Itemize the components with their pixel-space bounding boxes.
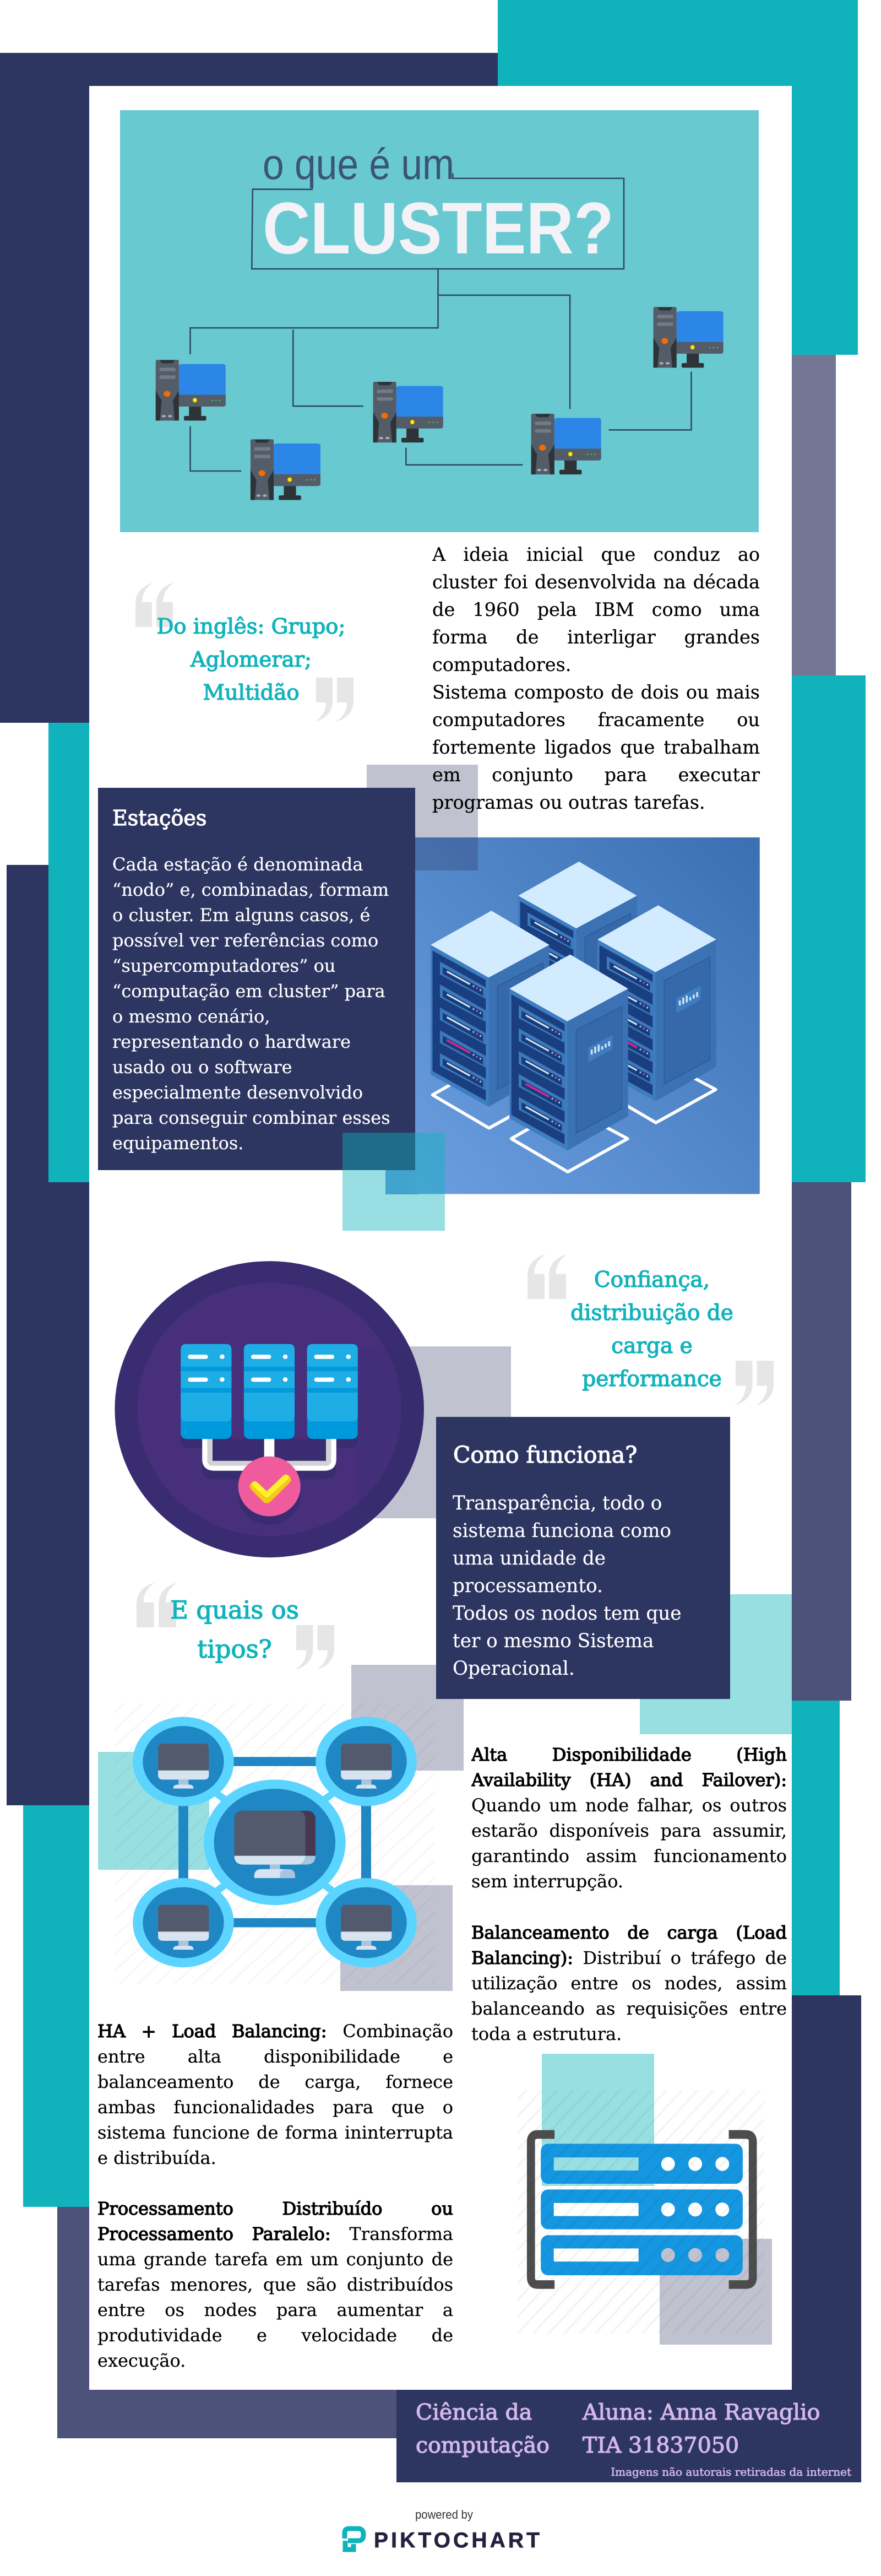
logo: powered by Piktochart: powered by <box>415 2508 473 2521</box>
icon: opening quote 3 <box>137 1583 177 1627</box>
text: high availability and load balancing: toda a estrutura. <box>471 2023 622 2044</box>
background block: navy left middle <box>7 865 89 1805</box>
node: bottom left <box>133 1878 234 1967</box>
quote: Confiança: Confiança, <box>594 1268 710 1292</box>
text: high availability and load balancing: Availability (HA) and Failover): <box>471 1769 787 1790</box>
icon: purple circle with servers and check <box>115 1261 424 1558</box>
icon: logo mark <box>345 2529 363 2550</box>
text: high availability and load balancing: Balanceamento de carga (Load <box>471 1922 787 1943</box>
footer text: student: Aluna: Anna Ravaglio <box>583 2400 820 2425</box>
text: HA + load balancing and distributed processing: produtividade e velocidade de <box>97 2325 453 2346</box>
text: Estações body: “supercomputadores” ou <box>112 955 335 976</box>
icon: server stack in brackets <box>518 2090 764 2334</box>
text: Estações body: o cluster. Em alguns casos, é <box>112 905 370 926</box>
title frame and connector lines <box>191 174 691 471</box>
text: HA + load balancing and distributed processing <box>97 2021 453 2371</box>
text: intro paragraph: computadores. <box>432 654 571 675</box>
quote: Do inglês: Do inglês: Grupo; <box>157 614 345 639</box>
text: high availability and load balancing <box>471 1744 787 2044</box>
background block: navy top left <box>0 53 498 723</box>
text: Estações body: possível ver referências como <box>112 930 378 951</box>
decorative square: grey behind purple icon <box>358 1346 511 1518</box>
background block: muted purple right <box>792 355 836 675</box>
decorative square: teal left of network <box>98 1752 209 1870</box>
quote: Confiança: carga e <box>611 1334 693 1359</box>
text: high availability and load balancing: balanceando as requisições entre <box>471 1998 787 2019</box>
text: Estações body: usado ou o software <box>112 1057 292 1078</box>
footer note: Imagens não autorais retiradas da internet <box>611 2465 851 2478</box>
background block: teal top right <box>498 0 858 355</box>
logo: powered by Piktochart: PIKTOCHART <box>374 2529 540 2552</box>
text: intro paragraph: programas ou outras tarefas. <box>432 792 705 813</box>
decorative square: translucent grey <box>367 765 478 870</box>
text: Estações body <box>112 854 390 1154</box>
text: high availability and load balancing: Quando um node falhar, os outros <box>471 1795 787 1816</box>
text: high availability and load balancing: utilização entre os nodes, assim <box>471 1973 787 1994</box>
text: HA + load balancing and distributed processing: balanceamento de carga, fornece <box>97 2071 453 2092</box>
text: high availability and load balancing: Balancing): Distribuí o tráfego de <box>471 1947 787 1968</box>
server units <box>181 1344 358 1439</box>
hero panel: what is a cluster <box>120 110 759 532</box>
title: o que é um cluster: CLUSTER? <box>263 188 614 269</box>
connector <box>208 1437 331 1466</box>
quote: E quais os tipos: E quais os <box>170 1595 299 1625</box>
text: Como funciona body: ter o mesmo Sistema <box>453 1630 654 1652</box>
rack: front <box>509 955 628 1172</box>
text: Estações body: especialmente desenvolvido <box>112 1082 363 1103</box>
title: o que é um cluster: o que é um <box>263 139 454 188</box>
quote: Confiança: performance <box>582 1367 722 1392</box>
text: intro paragraph: em conjunto para executar <box>432 764 760 786</box>
text: Estações body: para conseguir combinar esses <box>112 1107 390 1128</box>
text: Como funciona body: uma unidade de <box>453 1547 606 1570</box>
node: central monitor <box>204 1779 346 1905</box>
quote: Do inglês <box>157 614 345 705</box>
network diagram with computers <box>155 173 724 500</box>
text: HA + load balancing and distributed processing: execução. <box>97 2350 186 2371</box>
decorative square: grey bottom of network <box>340 1885 453 1991</box>
quote: Do inglês: Multidão <box>203 680 300 705</box>
text: intro paragraph: A ideia inicial que conduz ao <box>432 544 760 565</box>
background block: teal left lower <box>23 1805 89 2207</box>
text: intro paragraph: cluster foi desenvolvida na década <box>432 571 760 593</box>
footer text: course <box>416 2400 550 2458</box>
footer text: course: Ciência da <box>416 2400 532 2425</box>
decorative square: teal behind panel <box>640 1594 792 1734</box>
text: high availability and load balancing: sem interrupção. <box>471 1871 623 1892</box>
icon: opening quote 2 <box>527 1254 567 1299</box>
rack: right <box>597 905 716 1123</box>
text: HA + load balancing and distributed processing: Processamento Distribuído ou <box>97 2198 453 2219</box>
brackets <box>531 2134 753 2285</box>
text: HA + load balancing and distributed processing: e distribuída. <box>97 2147 216 2168</box>
icon: opening quote 1 <box>135 583 174 627</box>
white content panel <box>89 86 792 2390</box>
text: Estações body: equipamentos. <box>112 1133 243 1154</box>
text: Como funciona body: sistema funciona como <box>453 1520 671 1542</box>
text: HA + load balancing and distributed processing: sistema funcione de forma ininterrupta <box>97 2122 453 2143</box>
footer text: course: computação <box>416 2433 550 2458</box>
quote: Confiança: distribuição de <box>570 1301 733 1325</box>
title: o que é um cluster <box>263 139 614 269</box>
text: Estações body: Cada estação é denominada <box>112 854 363 875</box>
decorative square: grey below server <box>660 2239 772 2345</box>
text: HA + load balancing and distributed processing: HA + Load Balancing: Combinação <box>97 2021 453 2042</box>
text: HA + load balancing and distributed processing: ambas funcionalidades para que o <box>97 2097 453 2118</box>
text: Como funciona body: processamento. <box>453 1575 603 1597</box>
rack: left <box>431 911 550 1128</box>
icon: closing quote 2 <box>735 1361 774 1405</box>
quote: Confiança <box>570 1268 733 1392</box>
check badge <box>238 1457 301 1516</box>
text: intro paragraph <box>432 544 760 813</box>
text: HA + load balancing and distributed processing: tarefas menores, que são distribuídos <box>97 2274 453 2295</box>
decorative square: teal above server <box>542 2054 654 2186</box>
panel: Estações <box>98 788 415 1170</box>
icon: computers <box>156 307 724 500</box>
image extension: blue under the Estações panel <box>385 1157 418 1194</box>
text: intro paragraph: forma de interligar grandes <box>432 626 760 648</box>
text: Como funciona body: Transparência, todo o <box>453 1492 662 1514</box>
connectors <box>178 1757 371 1927</box>
text: Como funciona body: Todos os nodos tem que <box>453 1603 681 1625</box>
decorative square: grey top of network <box>351 1665 464 1771</box>
logo: powered by Piktochart <box>342 2508 540 2552</box>
footer text: student <box>582 2400 820 2458</box>
icon: closing quote 3 <box>295 1625 334 1670</box>
text: HA + load balancing and distributed processing: uma grande tarefa em um conjunto de <box>97 2249 453 2270</box>
icon: closing quote 1 <box>315 678 354 722</box>
quote: E quais os tipos: tipos? <box>197 1635 272 1664</box>
text: intro paragraph: fortemente ligados que trabalham <box>432 737 760 758</box>
panel: Como funciona <box>436 1417 730 1699</box>
text: Como funciona body <box>453 1492 681 1680</box>
text: Como funciona body: Operacional. <box>453 1658 575 1680</box>
text: intro paragraph: Sistema composto de dois ou mais <box>432 681 760 703</box>
heading: Como funciona: Como funciona? <box>453 1442 637 1468</box>
background block: teal right <box>792 675 866 1182</box>
text: high availability and load balancing: Alta Disponibilidade (High <box>471 1744 787 1765</box>
server rows <box>541 2144 743 2275</box>
background block: teal right lower <box>792 1701 840 1995</box>
shadows <box>181 1419 358 1525</box>
quote: Do inglês: Aglomerar; <box>191 647 312 672</box>
icon: network of computers <box>133 1717 417 1968</box>
background block: navy right lower <box>792 1995 861 2436</box>
decorative square: translucent teal <box>342 1133 445 1231</box>
text: Estações body: o mesmo cenário, <box>112 1006 270 1027</box>
background block: slate right <box>792 1182 851 1701</box>
footer panel <box>396 2390 861 2482</box>
text: HA + load balancing and distributed processing: Processamento Paralelo: Transforma <box>97 2223 453 2244</box>
image: blue server racks <box>415 837 760 1194</box>
background block: teal left upper <box>48 723 89 1182</box>
quote: E quais os tipos <box>170 1595 299 1664</box>
text: intro paragraph: de 1960 pela IBM como uma <box>432 599 760 620</box>
text: high availability and load balancing: estarão disponíveis para assumir, <box>471 1820 787 1841</box>
text: HA + load balancing and distributed processing: entre os nodes para aumentar a <box>97 2299 453 2320</box>
text: HA + load balancing and distributed processing: entre alta disponibilidade e <box>97 2046 453 2067</box>
text: intro paragraph: computadores fracamente ou <box>432 709 760 730</box>
text: Estações body: “nodo” e, combinadas, formam <box>112 879 389 900</box>
node: top left <box>133 1717 234 1806</box>
node: bottom right <box>316 1878 417 1967</box>
rack: back <box>518 862 637 1079</box>
heading: Estações: Estações <box>112 806 206 830</box>
text: Estações body: “computação em cluster” para <box>112 981 385 1002</box>
background block: slate bottom <box>57 2207 396 2438</box>
node: top right <box>316 1717 417 1806</box>
text: high availability and load balancing: garantindo assim funcionamento <box>471 1846 787 1866</box>
footer text: student: TIA 31837050 <box>583 2433 739 2458</box>
text: Estações body: representando o hardware <box>112 1031 351 1052</box>
